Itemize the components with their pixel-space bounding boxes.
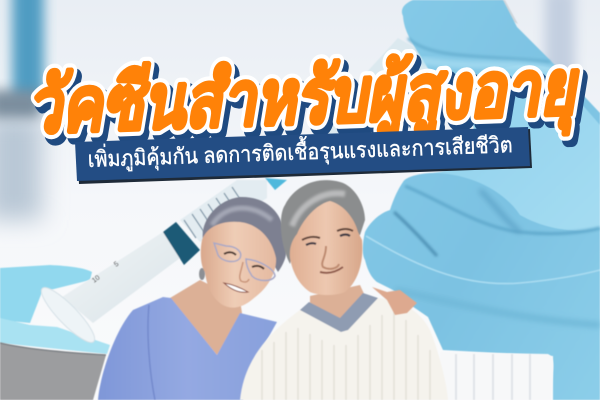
woman face	[201, 222, 276, 308]
left glove	[0, 265, 110, 354]
man nose	[322, 246, 339, 269]
woman blue top	[98, 297, 277, 400]
man white sweater	[240, 298, 448, 400]
woman glasses	[214, 243, 275, 280]
man	[240, 180, 448, 400]
woman nose	[240, 262, 249, 282]
flange	[35, 282, 101, 348]
blue glove hand	[363, 0, 600, 400]
upper barrel	[180, 180, 267, 242]
dark plunger ring	[163, 222, 200, 265]
finger folds	[366, 38, 600, 325]
woman's hand on shoulder	[372, 287, 417, 315]
white pillow	[440, 352, 553, 400]
woman eyes	[224, 252, 264, 269]
man grey collar	[300, 293, 378, 332]
woman smile	[224, 283, 248, 292]
woman	[98, 197, 286, 400]
syringe: 5	[113, 261, 120, 269]
cyan cap	[265, 178, 287, 190]
woman neck and chest	[170, 280, 242, 355]
man hair	[281, 180, 365, 264]
sweater ribs	[262, 312, 430, 400]
subtitle text: เพิ่มภูมิคุ้มกัน ลดการติดเชื้อรุนแรงและการเสียชีวิต	[87, 129, 513, 173]
syringe upper needle section	[312, 0, 518, 140]
thumb highlight	[430, 65, 600, 231]
woman earring	[199, 268, 205, 280]
woman hair	[203, 197, 286, 272]
graduation marks	[184, 187, 244, 238]
grey sofa	[0, 343, 106, 400]
man eyes and brows	[302, 229, 353, 240]
man face	[290, 201, 362, 295]
subtitle banner	[75, 127, 532, 184]
syringe: 10	[91, 274, 102, 285]
syringe	[35, 178, 287, 348]
man neck	[310, 285, 365, 322]
man mouth	[320, 267, 343, 273]
barrel	[62, 232, 180, 323]
